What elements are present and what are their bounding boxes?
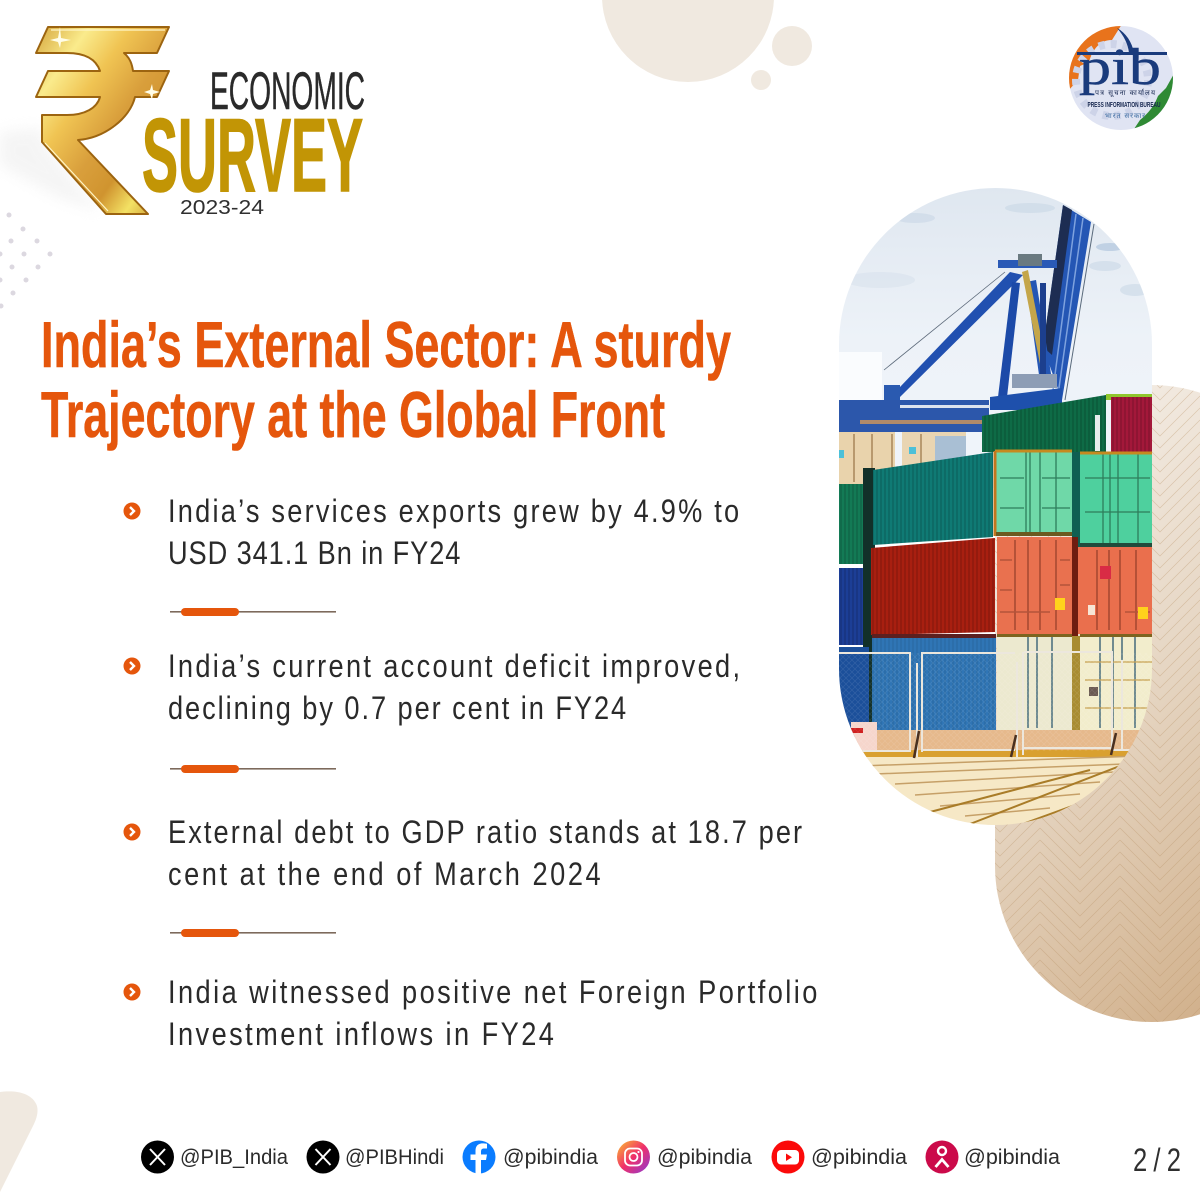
sky	[839, 188, 1152, 488]
dot pattern left	[0, 212, 52, 308]
bullet 4: foreign portfolio investment: Investment inflows in FY24	[168, 1017, 554, 1053]
page number: 2/2	[1133, 1143, 1181, 1179]
bullet 4: foreign portfolio investment: India witnessed positive net Foreign Portfolio	[168, 975, 817, 1011]
bullet 2: current account deficit: declining by 0.7 per cent in FY24	[168, 691, 626, 727]
bottom-left beige shape	[0, 1091, 38, 1192]
green arc	[1134, 76, 1173, 128]
red container row	[871, 538, 995, 635]
bullet 1: services exports: India’s services exports grew by 4.9% to	[168, 494, 739, 530]
handle: Koo: @pibindia	[964, 1146, 1060, 1169]
beige back containers	[839, 432, 895, 484]
text: year: 2023-24	[180, 197, 264, 219]
orange arc	[1069, 26, 1121, 89]
text: ECONOMIC: ECONOMIC	[210, 62, 365, 121]
ground	[852, 730, 1140, 752]
text: SURVEY: SURVEY	[142, 98, 363, 214]
icon: gold rupee symbol	[36, 27, 169, 214]
title: Trajectory at the Global Front	[41, 378, 665, 451]
logo: economic survey	[0, 27, 365, 219]
handle: Facebook: @pibindia	[503, 1146, 598, 1169]
handle: PIBHindi: @PIBHindi	[345, 1146, 444, 1169]
divider 1	[170, 608, 336, 616]
sign	[851, 722, 877, 750]
icon: X PIB_India	[141, 1140, 174, 1174]
hindi sub caption: भारत सरकार	[1105, 113, 1145, 120]
rupee shadow	[0, 128, 100, 212]
bullet 4: foreign portfolio investment	[124, 975, 817, 1053]
icon: Instagram	[617, 1140, 650, 1174]
photo: shipping containers and crane in capsule	[839, 188, 1152, 827]
bullet 3: external debt: cent at the end of March 2024	[168, 857, 601, 893]
handle: PIB_India: @PIB_India	[180, 1146, 288, 1169]
handle: Instagram: @pibindia	[657, 1146, 752, 1169]
hindi caption: पत्र सूचना कार्यालय	[1095, 88, 1156, 97]
logo caption: PRESS INFORMATION BUREAU	[1088, 100, 1161, 109]
icon: Facebook	[462, 1140, 496, 1174]
decorative circles at top	[602, 0, 812, 90]
blue and white container row	[839, 647, 869, 737]
pib letters: pib	[1079, 39, 1161, 96]
bullet 2: current account deficit	[124, 649, 740, 727]
social handles row	[141, 1140, 1060, 1174]
PIB logo	[1066, 24, 1175, 132]
divider 3	[170, 929, 336, 937]
title: India’s External Sector: A sturdy	[41, 308, 731, 381]
green and red back containers	[982, 395, 1106, 452]
tan chevron blob	[995, 385, 1200, 1022]
port building	[839, 352, 882, 400]
divider 2	[170, 765, 336, 773]
bullet 3: external debt	[124, 815, 802, 893]
teal container row	[863, 468, 875, 738]
icon: Koo style	[926, 1140, 958, 1174]
icon: YouTube	[772, 1140, 804, 1174]
bullet 1: services exports: USD 341.1 Bn in FY24	[168, 536, 460, 572]
bullet 3: external debt: External debt to GDP ratio stands at 18.7 per	[168, 815, 802, 851]
fence	[839, 653, 1152, 751]
bullet 2: current account deficit: India’s current account deficit improved,	[168, 649, 740, 685]
crane	[884, 205, 1094, 410]
icon: X PIBHindi	[306, 1140, 340, 1174]
title	[41, 308, 731, 451]
handle: YouTube: @pibindia	[811, 1146, 907, 1169]
bullet 1: services exports	[124, 494, 739, 572]
